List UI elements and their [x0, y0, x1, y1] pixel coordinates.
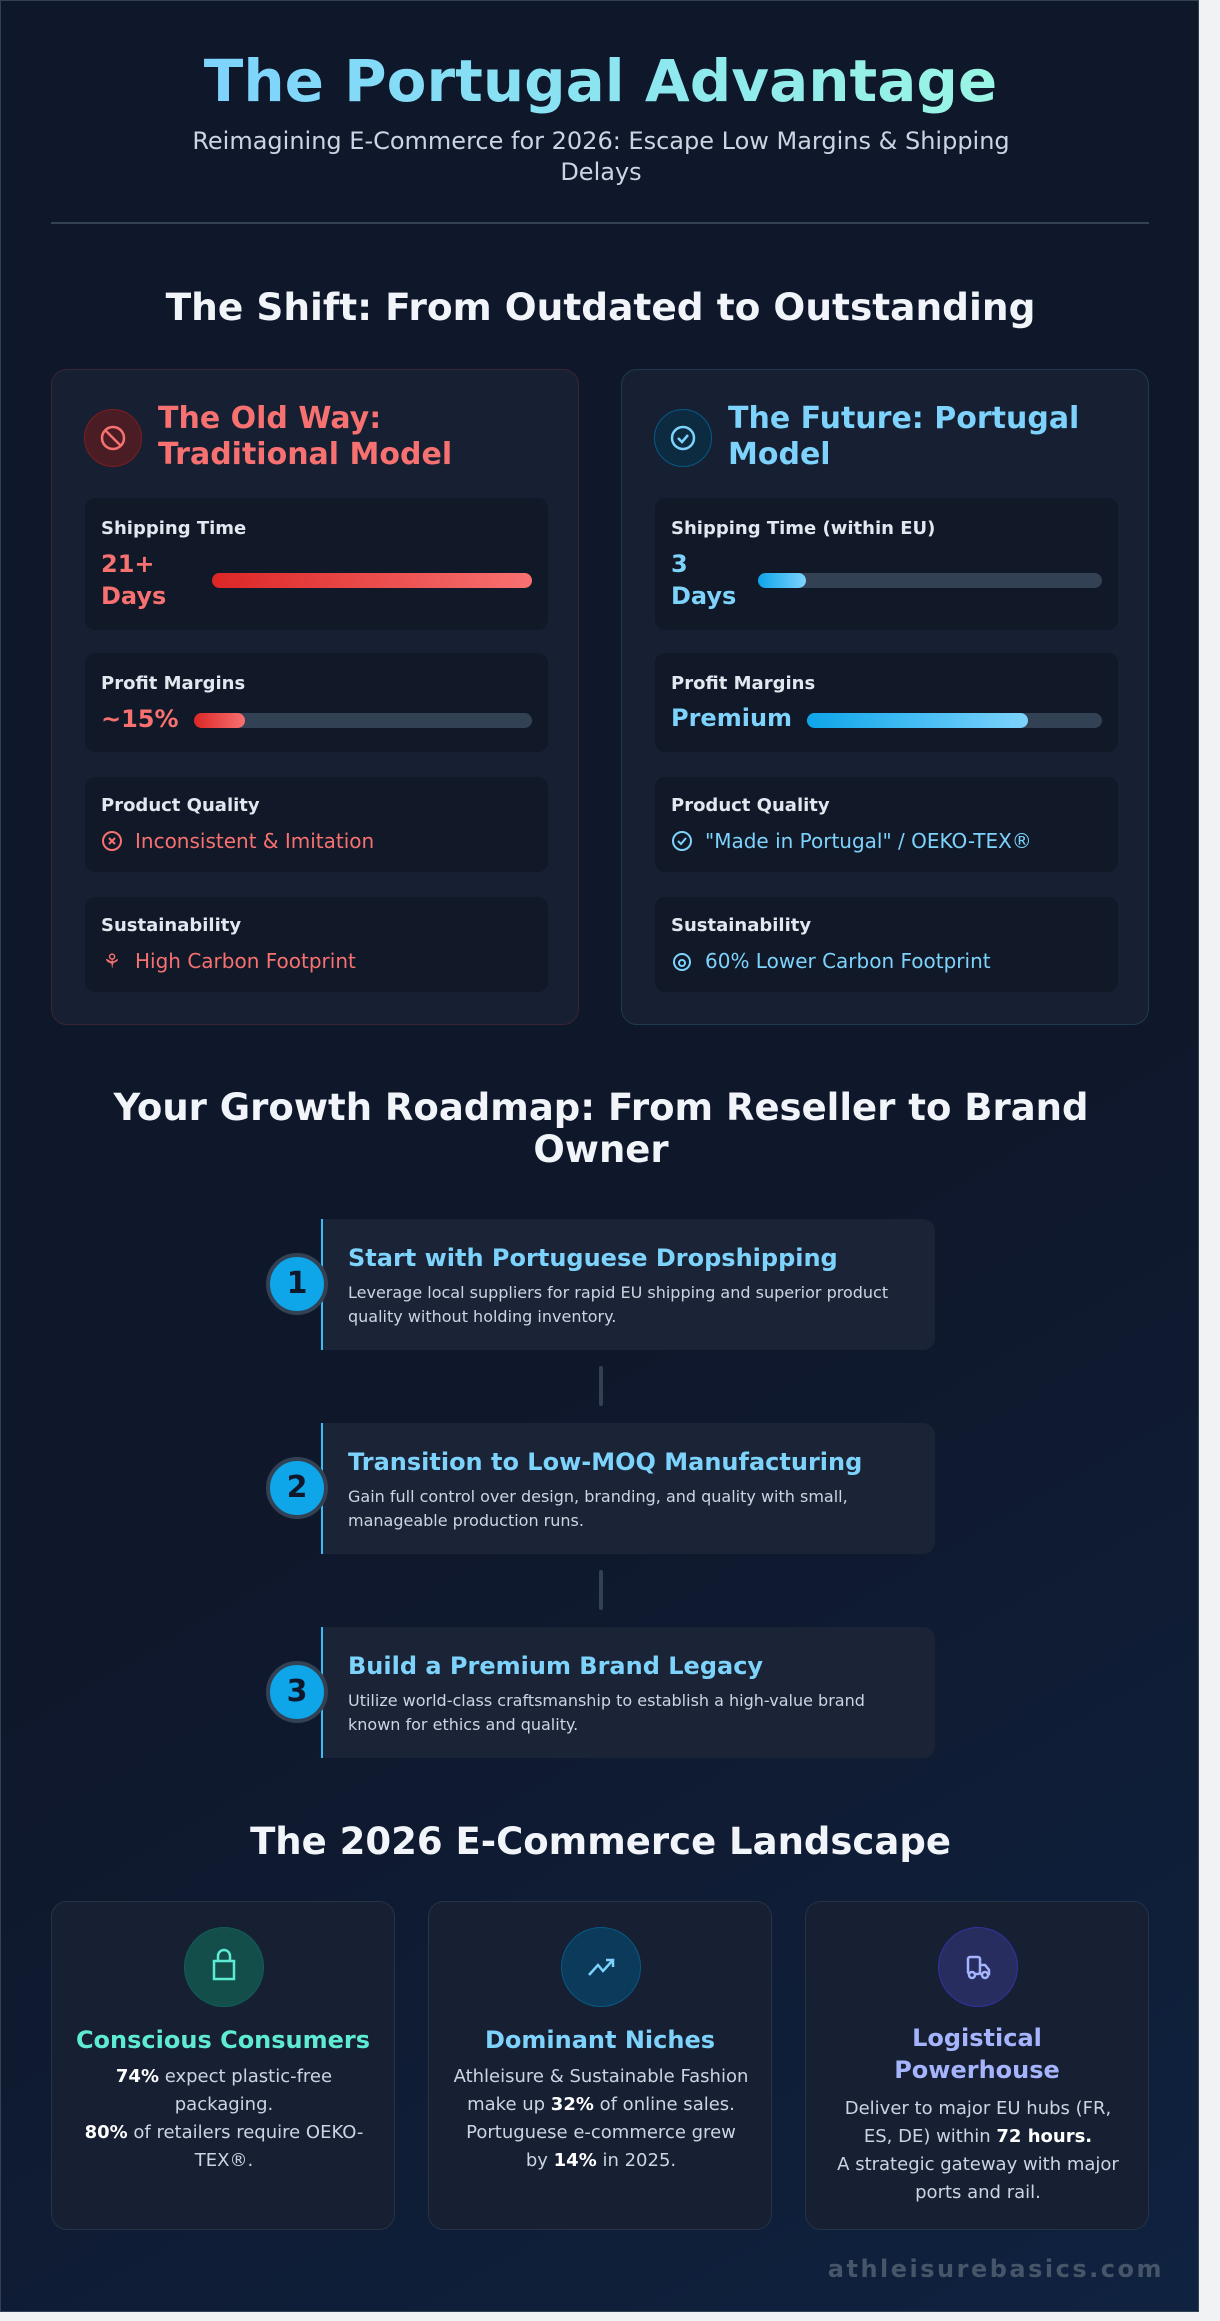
metric: shipping time: Shipping Time (within EU)	[671, 518, 935, 539]
card: dominant niches: Athleisure & Sustainable Fashion	[454, 2066, 748, 2087]
card: logistical powerhouse	[805, 1901, 1149, 2230]
card: logistical powerhouse: A strategic gateway with major	[837, 2154, 1119, 2175]
card: dominant niches: Portuguese e-commerce grew	[466, 2122, 736, 2143]
panel: future	[621, 369, 1149, 1025]
panel title: Traditional Model	[158, 437, 452, 472]
card: dominant niches: Dominant Niches	[485, 2026, 715, 2054]
card: logistical powerhouse: Logistical	[912, 2024, 1042, 2052]
text: 1	[287, 1266, 307, 1301]
step 1	[321, 1219, 935, 1350]
card: logistical powerhouse: Powerhouse	[894, 2056, 1060, 2084]
metric: shipping time: Days	[671, 582, 736, 610]
card: logistical powerhouse: ports and rail.	[915, 2182, 1041, 2203]
panel title: The Old Way:	[158, 401, 381, 436]
text: 2	[287, 1470, 307, 1505]
card: dominant niches	[428, 1901, 772, 2230]
metric: sustainability: Sustainability	[101, 915, 241, 936]
step 2	[321, 1423, 935, 1554]
text: 3	[287, 1674, 307, 1709]
panel title: The Future: Portugal	[728, 401, 1079, 436]
metric: product quality: Product Quality	[101, 795, 260, 816]
card: logistical powerhouse: Deliver to major EU hubs (FR,	[845, 2098, 1111, 2119]
card: conscious consumers: Conscious Consumers	[76, 2026, 370, 2054]
card: conscious consumers: packaging.	[175, 2094, 273, 2115]
metric: sustainability: High Carbon Footprint	[135, 949, 356, 973]
heading: the shift: The Shift: From Outdated to Outstanding	[166, 285, 1035, 329]
arrow: connector 1	[599, 1366, 603, 1406]
metric: sustainability	[655, 897, 1118, 992]
metric: sustainability	[85, 897, 548, 992]
metric: sustainability: ⚘	[103, 949, 121, 973]
metric: shipping time	[85, 498, 548, 630]
card: logistical powerhouse: ES, DE) within 72 hours.	[864, 2126, 1092, 2147]
step 1: Start with Portuguese Dropshipping	[348, 1244, 838, 1272]
step 2: Transition to Low-MOQ Manufacturing	[348, 1448, 862, 1476]
metric: shipping time: Shipping Time	[101, 518, 246, 539]
metric: sustainability: 60% Lower Carbon Footprint	[705, 949, 991, 973]
card: conscious consumers: 74% expect plastic-free	[116, 2066, 332, 2087]
heading: landscape: The 2026 E-Commerce Landscape	[250, 1820, 951, 1863]
metric: shipping time: Days	[101, 582, 166, 610]
metric: product quality	[655, 777, 1118, 872]
panel title	[728, 401, 1079, 472]
icon: shopping bag	[184, 1927, 264, 2007]
heading: roadmap: Your Growth Roadmap: From Reseller to Brand Owner	[114, 1086, 1088, 1171]
step 2: Gain full control over design, branding, and quality with small, manageable production runs.	[348, 1487, 848, 1530]
card: dominant niches: make up 32% of online sales.	[467, 2094, 735, 2115]
panel title	[158, 401, 452, 472]
metric: profit margins: Premium	[671, 704, 792, 732]
metric: product quality	[85, 777, 548, 872]
metric: shipping time	[655, 498, 1118, 630]
step 3: Utilize world-class craftsmanship to establish a high-value brand known for ethics and quality.	[348, 1691, 865, 1734]
icon: trend arrow	[561, 1927, 641, 2007]
step 3	[321, 1627, 935, 1758]
metric: profit margins	[85, 653, 548, 752]
step 3: Build a Premium Brand Legacy	[348, 1652, 763, 1680]
metric: profit margins: Profit Margins	[671, 673, 815, 694]
card: conscious consumers	[51, 1901, 395, 2230]
card: dominant niches: by 14% in 2025.	[526, 2150, 676, 2171]
metric: product quality: Product Quality	[671, 795, 830, 816]
metric: shipping time: 3	[671, 550, 688, 578]
metric: product quality: Inconsistent & Imitation	[135, 829, 374, 853]
metric: profit margins: ~15%	[101, 705, 179, 733]
metric: sustainability: Sustainability	[671, 915, 811, 936]
arrow: connector 2	[599, 1570, 603, 1610]
panel: old way	[51, 369, 579, 1025]
title: The Portugal Advantage	[204, 47, 997, 115]
icon: check	[654, 409, 712, 467]
icon: truck	[938, 1927, 1018, 2007]
metric: profit margins	[655, 653, 1118, 752]
step 1: Leverage local suppliers for rapid EU shipping and superior product quality without holding inventory.	[348, 1283, 888, 1326]
panel title: Model	[728, 437, 831, 472]
metric: product quality: "Made in Portugal" / OEKO-TEX®	[705, 829, 1032, 853]
metric: profit margins: Profit Margins	[101, 673, 245, 694]
metric: shipping time: 21+	[101, 550, 155, 578]
icon: prohibited	[84, 409, 142, 467]
subtitle: Reimagining E-Commerce for 2026: Escape Low Margins & Shipping Delays	[192, 127, 1010, 186]
card: conscious consumers: 80% of retailers require OEKO-	[85, 2122, 363, 2143]
footer: website: athleisurebasics.com	[828, 2255, 1164, 2283]
card: conscious consumers: TEX®.	[195, 2150, 253, 2171]
